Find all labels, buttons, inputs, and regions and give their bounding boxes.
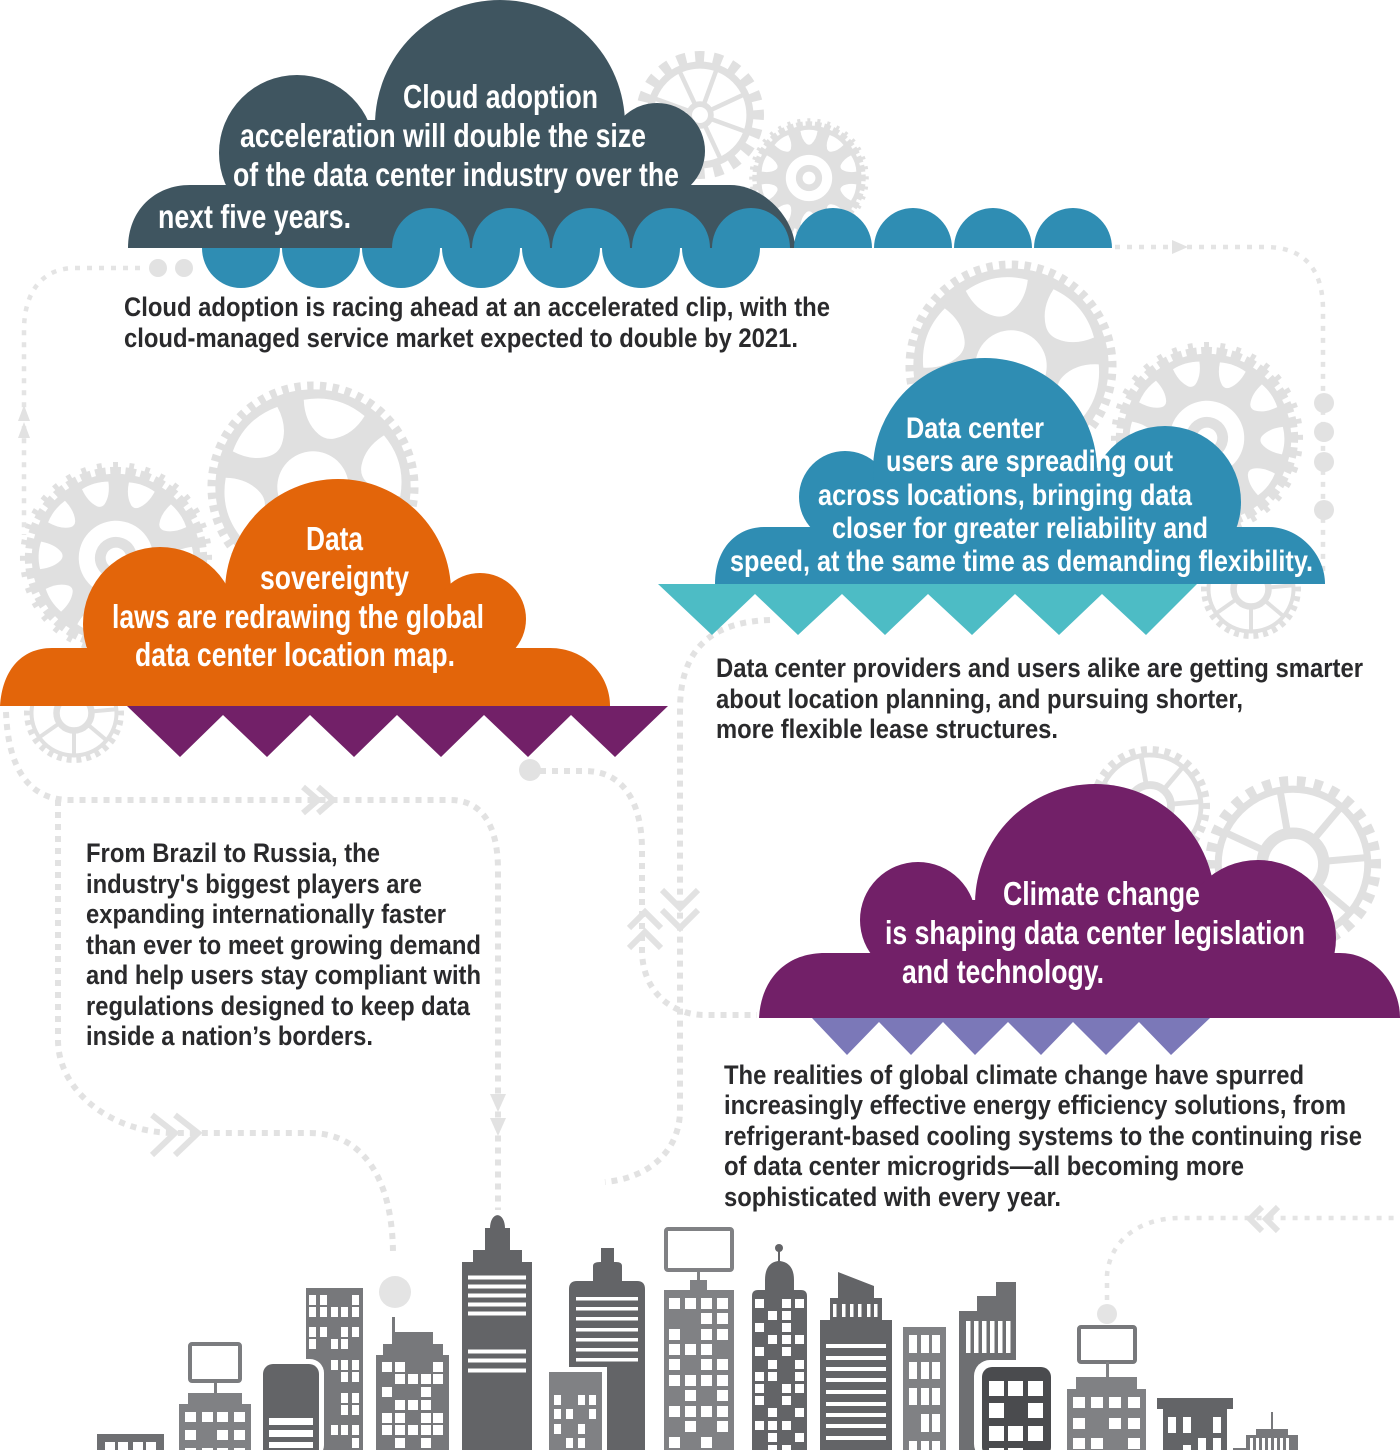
- building 9 with billboard: [664, 1229, 734, 1450]
- panel: climate change: [759, 784, 1400, 1055]
- heading: cloud adoption: Cloud adoption: [403, 78, 598, 115]
- purple triangles: [127, 706, 668, 757]
- purple cloud: [759, 784, 1400, 1024]
- blue cloud: [715, 358, 1325, 584]
- dark cloud: [128, 0, 795, 250]
- text block: climate change detail: The realities of global climate change have spurred: [724, 1060, 1304, 1090]
- panel: cloud adoption: [128, 0, 1112, 288]
- blue scallops on the cloud baseline: [392, 208, 1112, 248]
- text block: cloud adoption detail: Cloud adoption is racing ahead at an accelerated clip, with the: [124, 292, 830, 322]
- building 7 striped tower: [569, 1248, 645, 1450]
- heading: data sovereignty: data center location map.: [135, 636, 455, 673]
- heading: data center users: users are spreading out: [886, 445, 1173, 478]
- gears: lower right cluster: [1094, 750, 1376, 947]
- text block: brazil to russia detail: inside a nation’s borders.: [86, 1021, 373, 1051]
- text block: brazil to russia detail: than ever to meet growing demand: [86, 930, 481, 960]
- heading: climate change: and technology.: [902, 953, 1104, 990]
- building 5 with spire: [376, 1317, 449, 1450]
- heading: data sovereignty: Data: [306, 520, 364, 557]
- building 15 with billboard: [1067, 1327, 1146, 1450]
- panel: data center users: [658, 358, 1325, 635]
- building 14 dark rounded: [974, 1360, 1059, 1450]
- heading: climate change: Climate change: [1003, 875, 1200, 912]
- building 13 stepped: [959, 1282, 1016, 1450]
- panel: data sovereignty: [0, 479, 668, 757]
- lavender triangles: [812, 1018, 1210, 1055]
- heading: climate change: is shaping data center legislation: [885, 914, 1305, 951]
- orange cloud: [0, 479, 610, 706]
- heading: cloud adoption: acceleration will double the size: [240, 117, 646, 154]
- blue scallops under the cloud: [202, 248, 760, 288]
- gears: top cluster: [642, 57, 867, 236]
- building 17 small: [1233, 1412, 1298, 1450]
- teal triangles: [658, 584, 1197, 635]
- heading: data center users: Data center: [906, 412, 1044, 445]
- building 11 finned: [820, 1272, 892, 1450]
- building 8 small front: [544, 1367, 607, 1450]
- dotted connector paths: [6, 240, 1395, 1324]
- building 4 tall windows: [306, 1288, 363, 1450]
- text block: brazil to russia detail: industry's biggest players are: [86, 869, 422, 899]
- text block: cloud adoption detail: cloud-managed service market expected to double by 2021.: [124, 323, 798, 353]
- text block: location planning detail: more flexible lease structures.: [716, 714, 1058, 744]
- text block: climate change detail: sophisticated with every year.: [724, 1182, 1061, 1212]
- heading: cloud adoption: next five years.: [158, 198, 351, 235]
- gears: left cluster: [0, 364, 436, 760]
- heading: data sovereignty: sovereignty: [260, 559, 410, 596]
- heading: data center users: across locations, bringing data: [818, 479, 1192, 512]
- heading: cloud adoption: of the data center industry over the: [233, 156, 679, 193]
- building 12 narrow: [903, 1327, 946, 1450]
- heading: data center users: closer for greater reliability and: [832, 512, 1208, 545]
- text block: brazil to russia detail: regulations designed to keep data: [86, 991, 471, 1021]
- text block: brazil to russia detail: and help users stay compliant with: [86, 960, 481, 990]
- city skyline: [97, 1215, 1298, 1450]
- heading: data sovereignty: laws are redrawing the global: [112, 598, 484, 635]
- text block: climate change detail: of data center microgrids—all becoming more: [724, 1151, 1244, 1181]
- building 1: [97, 1434, 164, 1450]
- building 3 rounded: [258, 1359, 324, 1450]
- central tower: [462, 1215, 532, 1450]
- text block: location planning detail: about location planning, and pursuing shorter,: [716, 684, 1243, 714]
- text block: brazil to russia detail: expanding internationally faster: [86, 899, 446, 929]
- building 10 domed: [752, 1244, 807, 1450]
- text block: brazil to russia detail: From Brazil to Russia, the: [86, 838, 380, 868]
- gears: right cluster: [894, 249, 1326, 636]
- building 16 capped: [1157, 1398, 1233, 1450]
- building 2 with billboard: [179, 1344, 251, 1450]
